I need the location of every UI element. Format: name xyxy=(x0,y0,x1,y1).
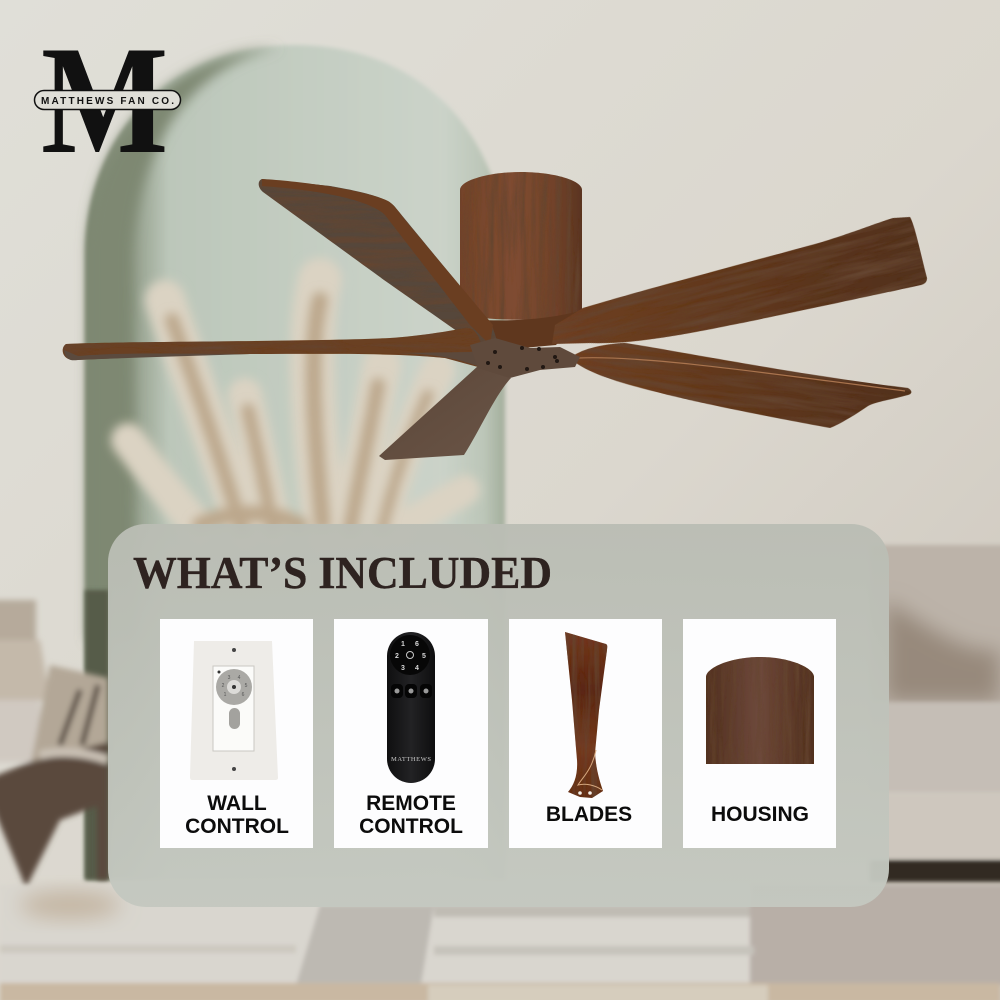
icon: remote: 5 xyxy=(422,653,426,660)
chair and throw blanket xyxy=(0,600,108,888)
blade: left xyxy=(63,328,490,367)
icon: wall control: 4 xyxy=(238,675,241,681)
logo monogram letter: M xyxy=(41,15,168,186)
blade: upper right xyxy=(522,129,957,432)
icon: wall control: 2 xyxy=(222,683,225,689)
fan housing xyxy=(460,172,582,320)
card: wall control xyxy=(160,619,313,848)
icon: wall control: 5 xyxy=(245,683,248,689)
icon: wall control xyxy=(190,641,278,780)
ceiling fan xyxy=(63,129,957,475)
arched wall niche xyxy=(85,45,505,880)
blade: lower right xyxy=(558,296,923,475)
logo name pill: MATTHEWS FAN CO. xyxy=(41,96,174,107)
wood collar under housing xyxy=(458,310,584,350)
inlay line on lower right blade xyxy=(578,358,905,391)
card: housing xyxy=(683,619,836,848)
pampas grass xyxy=(128,280,465,530)
icon: remote: 1 xyxy=(401,641,405,648)
floor xyxy=(0,885,1000,1000)
label: REMOTE xyxy=(366,792,456,815)
sofa xyxy=(870,545,1000,882)
icon: wall control: 6 xyxy=(242,692,245,698)
card: blades xyxy=(509,619,662,848)
icon: remote: 4 xyxy=(415,665,419,672)
card: wall control: CONTROL xyxy=(185,815,289,838)
icon: blade xyxy=(565,632,607,798)
card: remote control: CONTROL xyxy=(359,815,463,838)
label: WALL xyxy=(207,792,267,815)
icon: wall control: 1 xyxy=(224,692,227,698)
hub plate with screws xyxy=(470,338,580,378)
card: remote control xyxy=(334,619,488,848)
icon: housing xyxy=(706,657,814,764)
icon: remote: MATTHEWS xyxy=(391,756,431,763)
icon: wall control: 3 xyxy=(228,675,231,681)
icon: remote xyxy=(387,632,435,783)
icon: remote: 3 xyxy=(401,665,405,672)
heading: WHAT’S INCLUDED xyxy=(133,547,552,598)
logo xyxy=(34,15,180,186)
icon: remote: 2 xyxy=(395,653,399,660)
panel: what's included xyxy=(108,524,889,907)
logo name pill xyxy=(34,90,180,110)
blade: lower left xyxy=(379,366,511,460)
label: BLADES xyxy=(546,803,632,826)
icon: remote: 6 xyxy=(415,641,419,648)
blade: upper left xyxy=(259,179,500,350)
label: HOUSING xyxy=(711,803,809,826)
